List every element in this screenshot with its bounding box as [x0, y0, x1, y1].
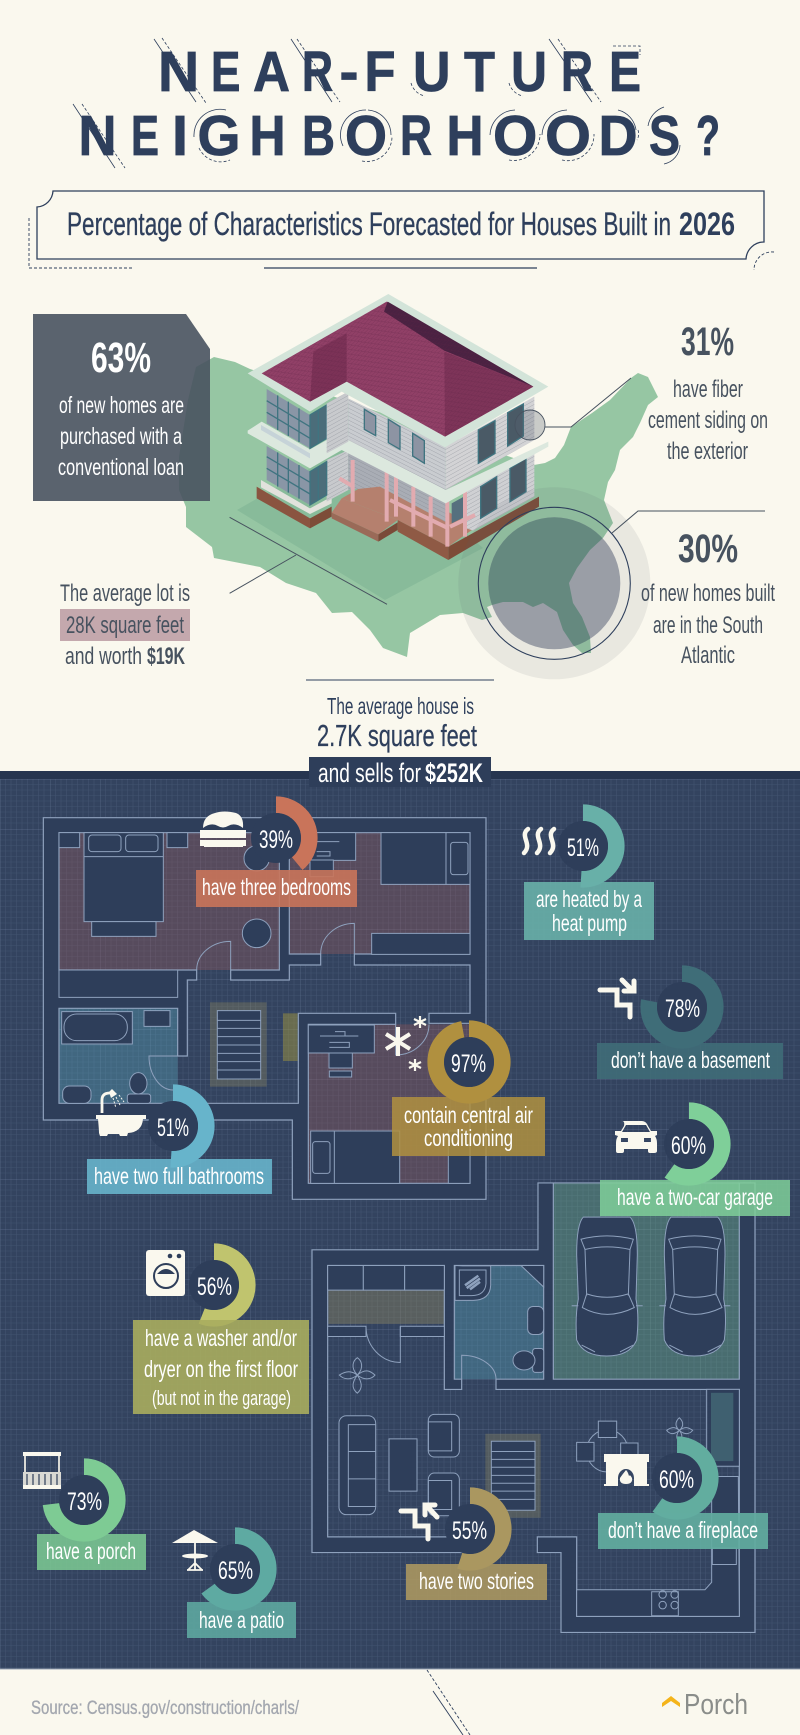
stat: 55% two stories: [401, 1496, 547, 1600]
callout: lot size: $19K: [147, 643, 185, 670]
Porch logo: [662, 1689, 748, 1721]
stat: 56% washer and dryer: [133, 1250, 309, 1414]
title: H: [250, 104, 286, 168]
title: R: [302, 40, 333, 104]
callout: lot size: 28K square feet: [66, 612, 184, 639]
stat: 51% heat pump: are heated by a: [536, 886, 642, 912]
icon: fireplace: [604, 1454, 649, 1486]
subtitle banner: 2026: [679, 206, 735, 242]
icon: cold air asterisks: [386, 1016, 426, 1071]
roof: [248, 294, 548, 447]
icon: patio umbrella table: [172, 1530, 218, 1570]
title: E: [211, 40, 240, 104]
floor plan: downstairs: [312, 1183, 755, 1632]
title: U: [511, 40, 547, 104]
callout: loan panel: 63%: [91, 334, 151, 382]
floor plan: upstairs: [43, 818, 486, 1199]
lower floor: [261, 446, 534, 531]
foundation and porch deck: [257, 477, 539, 560]
stat: 39% three bedrooms: 39%: [259, 826, 293, 854]
lot: [237, 440, 483, 600]
stat: 60% fireplace: [598, 1445, 768, 1549]
furniture: [59, 833, 470, 1183]
stat: 55% two stories: 55%: [452, 1517, 487, 1545]
title: O: [345, 104, 387, 168]
stat: 78% no basement: [597, 974, 783, 1079]
title: G: [198, 104, 240, 168]
lot callout line: [230, 517, 387, 604]
icon: heat waves: [524, 829, 554, 853]
title: I: [172, 104, 188, 168]
furniture: [328, 1266, 739, 1616]
title: A: [253, 40, 290, 104]
stat: 51% heat pump: 51%: [567, 834, 599, 862]
source line: Source: Census.gov/construction/charls/: [31, 1698, 300, 1719]
stat: 39% three bedrooms: have three bedrooms: [202, 874, 351, 900]
icon: bathtub with shower: [96, 1089, 146, 1136]
belt course: [248, 422, 548, 503]
stat: 65% patio: have a patio: [199, 1607, 284, 1633]
title: E: [131, 104, 159, 168]
stat: 60% fireplace: 60%: [659, 1466, 694, 1494]
callout: South Atlantic: 30%: [678, 527, 738, 571]
stat: 78% no basement: 78%: [665, 995, 700, 1023]
footer: [0, 1669, 800, 1735]
room tints: [59, 833, 470, 1183]
room tints: [328, 1183, 739, 1518]
stat: 51% two full bathrooms: [87, 1089, 272, 1194]
icon: washing machine: [146, 1250, 185, 1296]
stat: 60% two-car garage: [600, 1111, 790, 1216]
stat: 60% two-car garage: 60%: [671, 1132, 706, 1160]
stat: 51% two full bathrooms: have two full bathrooms: [94, 1163, 264, 1189]
South Atlantic magnifier: [458, 487, 650, 679]
icon: car: [615, 1121, 657, 1153]
callout: fiber cement siding: have fiber: [673, 376, 743, 403]
stat: 97% central air: contain central air: [404, 1102, 533, 1128]
title: R: [561, 40, 593, 104]
icon: porch: [23, 1452, 61, 1489]
house illustration on lot: [237, 294, 548, 600]
callout: South Atlantic: Atlantic: [681, 642, 735, 669]
stat: 51% two full bathrooms: 51%: [157, 1114, 189, 1142]
callout: average house: 2.7K square feet: [317, 718, 477, 753]
callout: lot size: The average lot is: [60, 580, 190, 607]
Porch logo: Porch: [684, 1689, 748, 1721]
stat: 39% three bedrooms: [196, 805, 357, 907]
callout: average house: and sells for: [318, 758, 421, 788]
porch columns: [339, 460, 475, 547]
title construction lines: [73, 38, 680, 168]
title: E: [609, 40, 641, 104]
title: T: [464, 40, 495, 104]
stat: 56% washer and dryer: 56%: [197, 1273, 232, 1301]
title: N: [78, 104, 116, 168]
callout: average house: The average house is: [327, 693, 474, 719]
title: S: [649, 104, 680, 168]
callout: fiber cement siding: 31%: [681, 320, 734, 364]
title: D: [598, 104, 638, 168]
icon: stairs going down: [600, 980, 634, 1017]
stat: 51% heat pump: heat pump: [552, 910, 627, 936]
callout: South Atlantic: [612, 511, 775, 669]
callout: fiber cement siding: the exterior: [667, 438, 748, 465]
icon: bed: [200, 812, 246, 847]
callout: fiber cement siding: [515, 320, 768, 465]
stat: 56% washer and dryer: have a washer and/or: [145, 1325, 297, 1351]
title: O: [545, 104, 591, 168]
stat: 97% central air: 97%: [451, 1050, 486, 1078]
stat: 51% heat pump: [524, 813, 654, 940]
callout: loan panel: purchased with a: [60, 423, 182, 449]
callout: average house: [306, 680, 494, 788]
stat: 73% porch: [23, 1452, 146, 1570]
title: U: [413, 40, 450, 104]
callout: loan panel: [33, 314, 210, 501]
blueprint background: [0, 771, 800, 1669]
title: R: [400, 104, 432, 168]
stat: 73% porch: have a porch: [46, 1538, 136, 1564]
subtitle banner: [29, 191, 774, 270]
title: N: [158, 40, 199, 104]
stat: 97% central air: conditioning: [424, 1125, 513, 1151]
title: ?: [696, 104, 720, 168]
walls: [312, 1183, 755, 1632]
callout: loan panel: conventional loan: [58, 454, 184, 480]
title: O: [493, 104, 537, 168]
title: B: [302, 104, 335, 168]
callout: lot size: [60, 580, 190, 670]
two parked cars: [572, 1217, 730, 1356]
callout: lot size: and worth: [65, 643, 142, 670]
icon: stairs going up: [401, 1505, 437, 1539]
US map: [179, 357, 658, 657]
title: F: [364, 40, 396, 104]
callout: loan panel: of new homes are: [59, 392, 184, 418]
title: -: [340, 40, 358, 104]
title: H: [446, 104, 484, 168]
callout: average house: $252K: [425, 758, 483, 788]
stat: 65% patio: 65%: [218, 1557, 253, 1585]
upper floor: [267, 389, 534, 490]
stat: 55% two stories: have two stories: [419, 1568, 534, 1594]
walls: [43, 818, 486, 1199]
stat: 56% washer and dryer: dryer on the first floor: [144, 1356, 298, 1382]
stat: 73% porch: 73%: [67, 1488, 102, 1516]
title: [78, 40, 720, 168]
stat: 56% washer and dryer: (but not in the garage): [152, 1388, 291, 1410]
stat: 65% patio: [172, 1530, 296, 1638]
stat: 97% central air: [386, 1016, 545, 1156]
